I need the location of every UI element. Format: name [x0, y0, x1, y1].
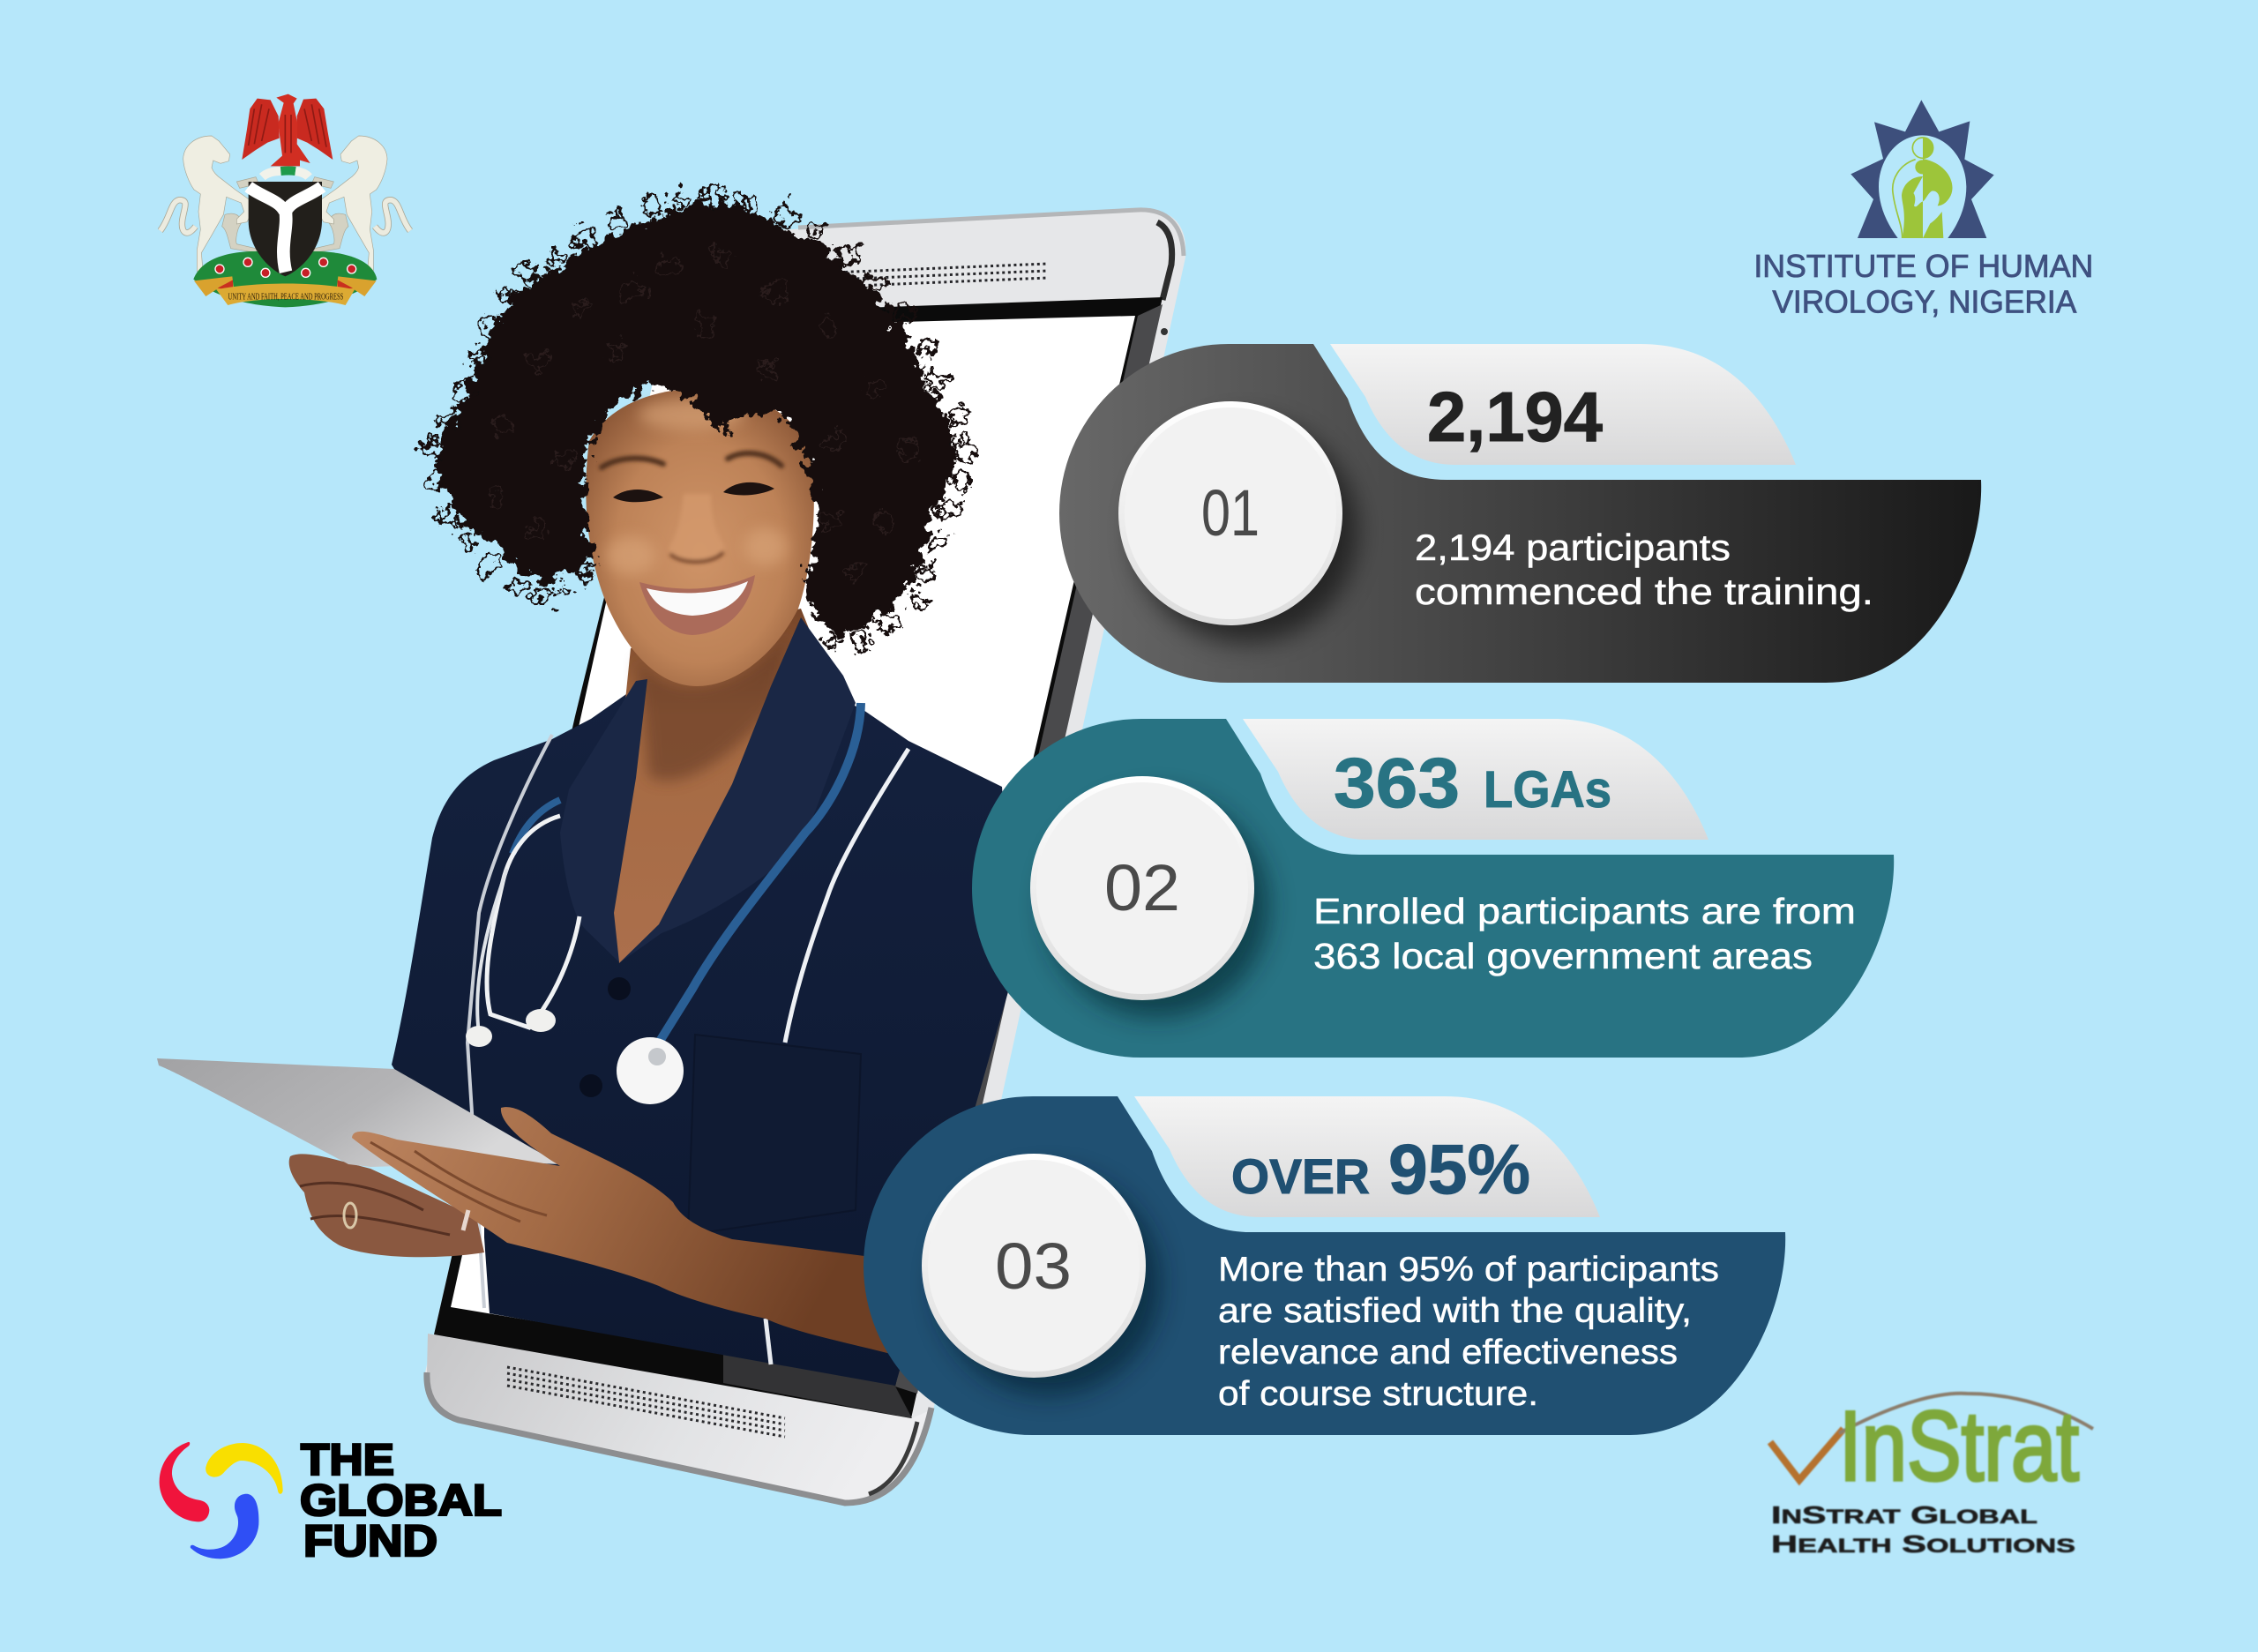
company name: H EALTH S OLUTIONS — [1771, 1530, 2075, 1558]
panel 01: 2,194 participants — [1059, 344, 1981, 683]
woman: nurse holding a tablet — [157, 186, 1014, 1386]
logo: Institute of Human Virology, Nigeria — [1753, 100, 2093, 319]
screen — [451, 316, 1135, 1380]
stethoscope tubes — [477, 703, 861, 1043]
stat tab — [1330, 344, 1796, 465]
description: are satisfied with the quality, — [1218, 1292, 1692, 1330]
InStrat wordmark: InStrat — [1839, 1391, 2079, 1501]
description — [1415, 527, 1873, 612]
description: of course structure. — [1218, 1375, 1538, 1413]
phone — [425, 210, 1185, 1505]
top speaker — [834, 264, 1047, 287]
left horse — [161, 136, 258, 278]
wreath — [262, 170, 309, 177]
lower piping — [766, 1319, 771, 1364]
cheek highlights — [606, 399, 787, 575]
lips — [639, 575, 755, 635]
swirl mark — [160, 1442, 283, 1559]
stat value: 2,194 — [1427, 377, 1603, 456]
chin shadow — [637, 631, 789, 781]
right horse — [311, 136, 410, 278]
description — [1313, 891, 1856, 976]
description: relevance and effectiveness — [1218, 1334, 1678, 1372]
star emblem — [1851, 100, 1994, 238]
pocket — [688, 1035, 861, 1235]
screen bezel — [434, 297, 1163, 1418]
bottom dark bar — [723, 1348, 912, 1418]
camera dot — [1161, 328, 1168, 335]
description: 363 local government areas — [1313, 936, 1813, 976]
green mound with flowers — [193, 251, 377, 307]
institute name: INSTITUTE OF HUMAN — [1753, 248, 2093, 284]
logo: The Global Fund — [160, 1435, 502, 1566]
shield — [249, 182, 322, 276]
number disc: 01 — [1201, 476, 1260, 549]
logo: InStrat Global Health Solutions — [1770, 1391, 2093, 1558]
stat value: 95% — [1388, 1130, 1530, 1208]
description: Enrolled participants are from — [1313, 891, 1856, 931]
left piping — [467, 735, 552, 1308]
ring on right hand — [463, 1210, 468, 1230]
number disc: 03 — [995, 1230, 1072, 1303]
description — [1218, 1251, 1719, 1413]
panel shape — [864, 1096, 1785, 1435]
stat tab — [1243, 719, 1708, 840]
ear pieces — [466, 1009, 556, 1047]
description: 2,194 participants — [1415, 527, 1731, 568]
bottom rim shadow — [427, 1372, 931, 1503]
buttons — [579, 977, 631, 1097]
company name: IN S TRAT G LOBAL — [1771, 1501, 2037, 1529]
logo: Nigerian coat of arms — [161, 94, 410, 307]
phone body — [425, 210, 1185, 1505]
banner — [194, 276, 377, 305]
face — [586, 388, 814, 686]
banner: UNITY AND FAITH, PEACE AND PROGRESS — [228, 292, 343, 302]
panel 03: over 95% — [864, 1096, 1785, 1435]
description: commenced the training. — [1415, 571, 1873, 612]
chest and neck — [607, 609, 829, 963]
stat tab — [1134, 1096, 1600, 1217]
institute name: VIROLOGY, NIGERIA — [1772, 283, 2076, 319]
bottom speaker — [507, 1367, 785, 1437]
panel shape — [972, 719, 1894, 1058]
uniform body — [392, 688, 1014, 1386]
stat value: 363 — [1334, 744, 1460, 822]
nose — [669, 494, 725, 562]
teeth — [647, 581, 748, 616]
left lapel — [560, 679, 647, 962]
check mark and arc — [1770, 1394, 2093, 1480]
stat value — [1231, 1130, 1530, 1208]
hair — [422, 186, 975, 652]
chest piece — [617, 1037, 684, 1104]
institute name — [1753, 248, 2093, 319]
number disc — [1118, 401, 1357, 643]
right lapel — [619, 617, 856, 963]
right bezel grey strip — [895, 304, 1163, 1394]
number disc: 02 — [1104, 851, 1180, 924]
wordmark — [300, 1435, 502, 1566]
wordmark: GLOBAL — [300, 1476, 502, 1525]
description: More than 95% of participants — [1218, 1251, 1719, 1289]
panel 02: 363 LGAs — [972, 719, 1894, 1058]
stat value: OVER — [1231, 1148, 1370, 1204]
eagle — [242, 94, 333, 166]
eyes — [613, 482, 774, 502]
right piping — [785, 749, 908, 1043]
stat value — [1334, 744, 1611, 822]
wordmark: FUND — [303, 1516, 437, 1566]
bottom silver panel — [427, 1334, 928, 1501]
company name — [1771, 1501, 2075, 1558]
eyebrows — [602, 453, 781, 467]
number disc — [1030, 776, 1269, 1018]
left hand under tablet — [289, 1154, 484, 1257]
number disc — [922, 1154, 1161, 1395]
panel shape — [1059, 344, 1981, 683]
top rim — [798, 210, 1184, 256]
tablet — [157, 1058, 560, 1167]
wordmark: THE — [301, 1435, 394, 1484]
right hand and forearm — [352, 1107, 891, 1354]
stat value: LGAs — [1484, 761, 1611, 819]
